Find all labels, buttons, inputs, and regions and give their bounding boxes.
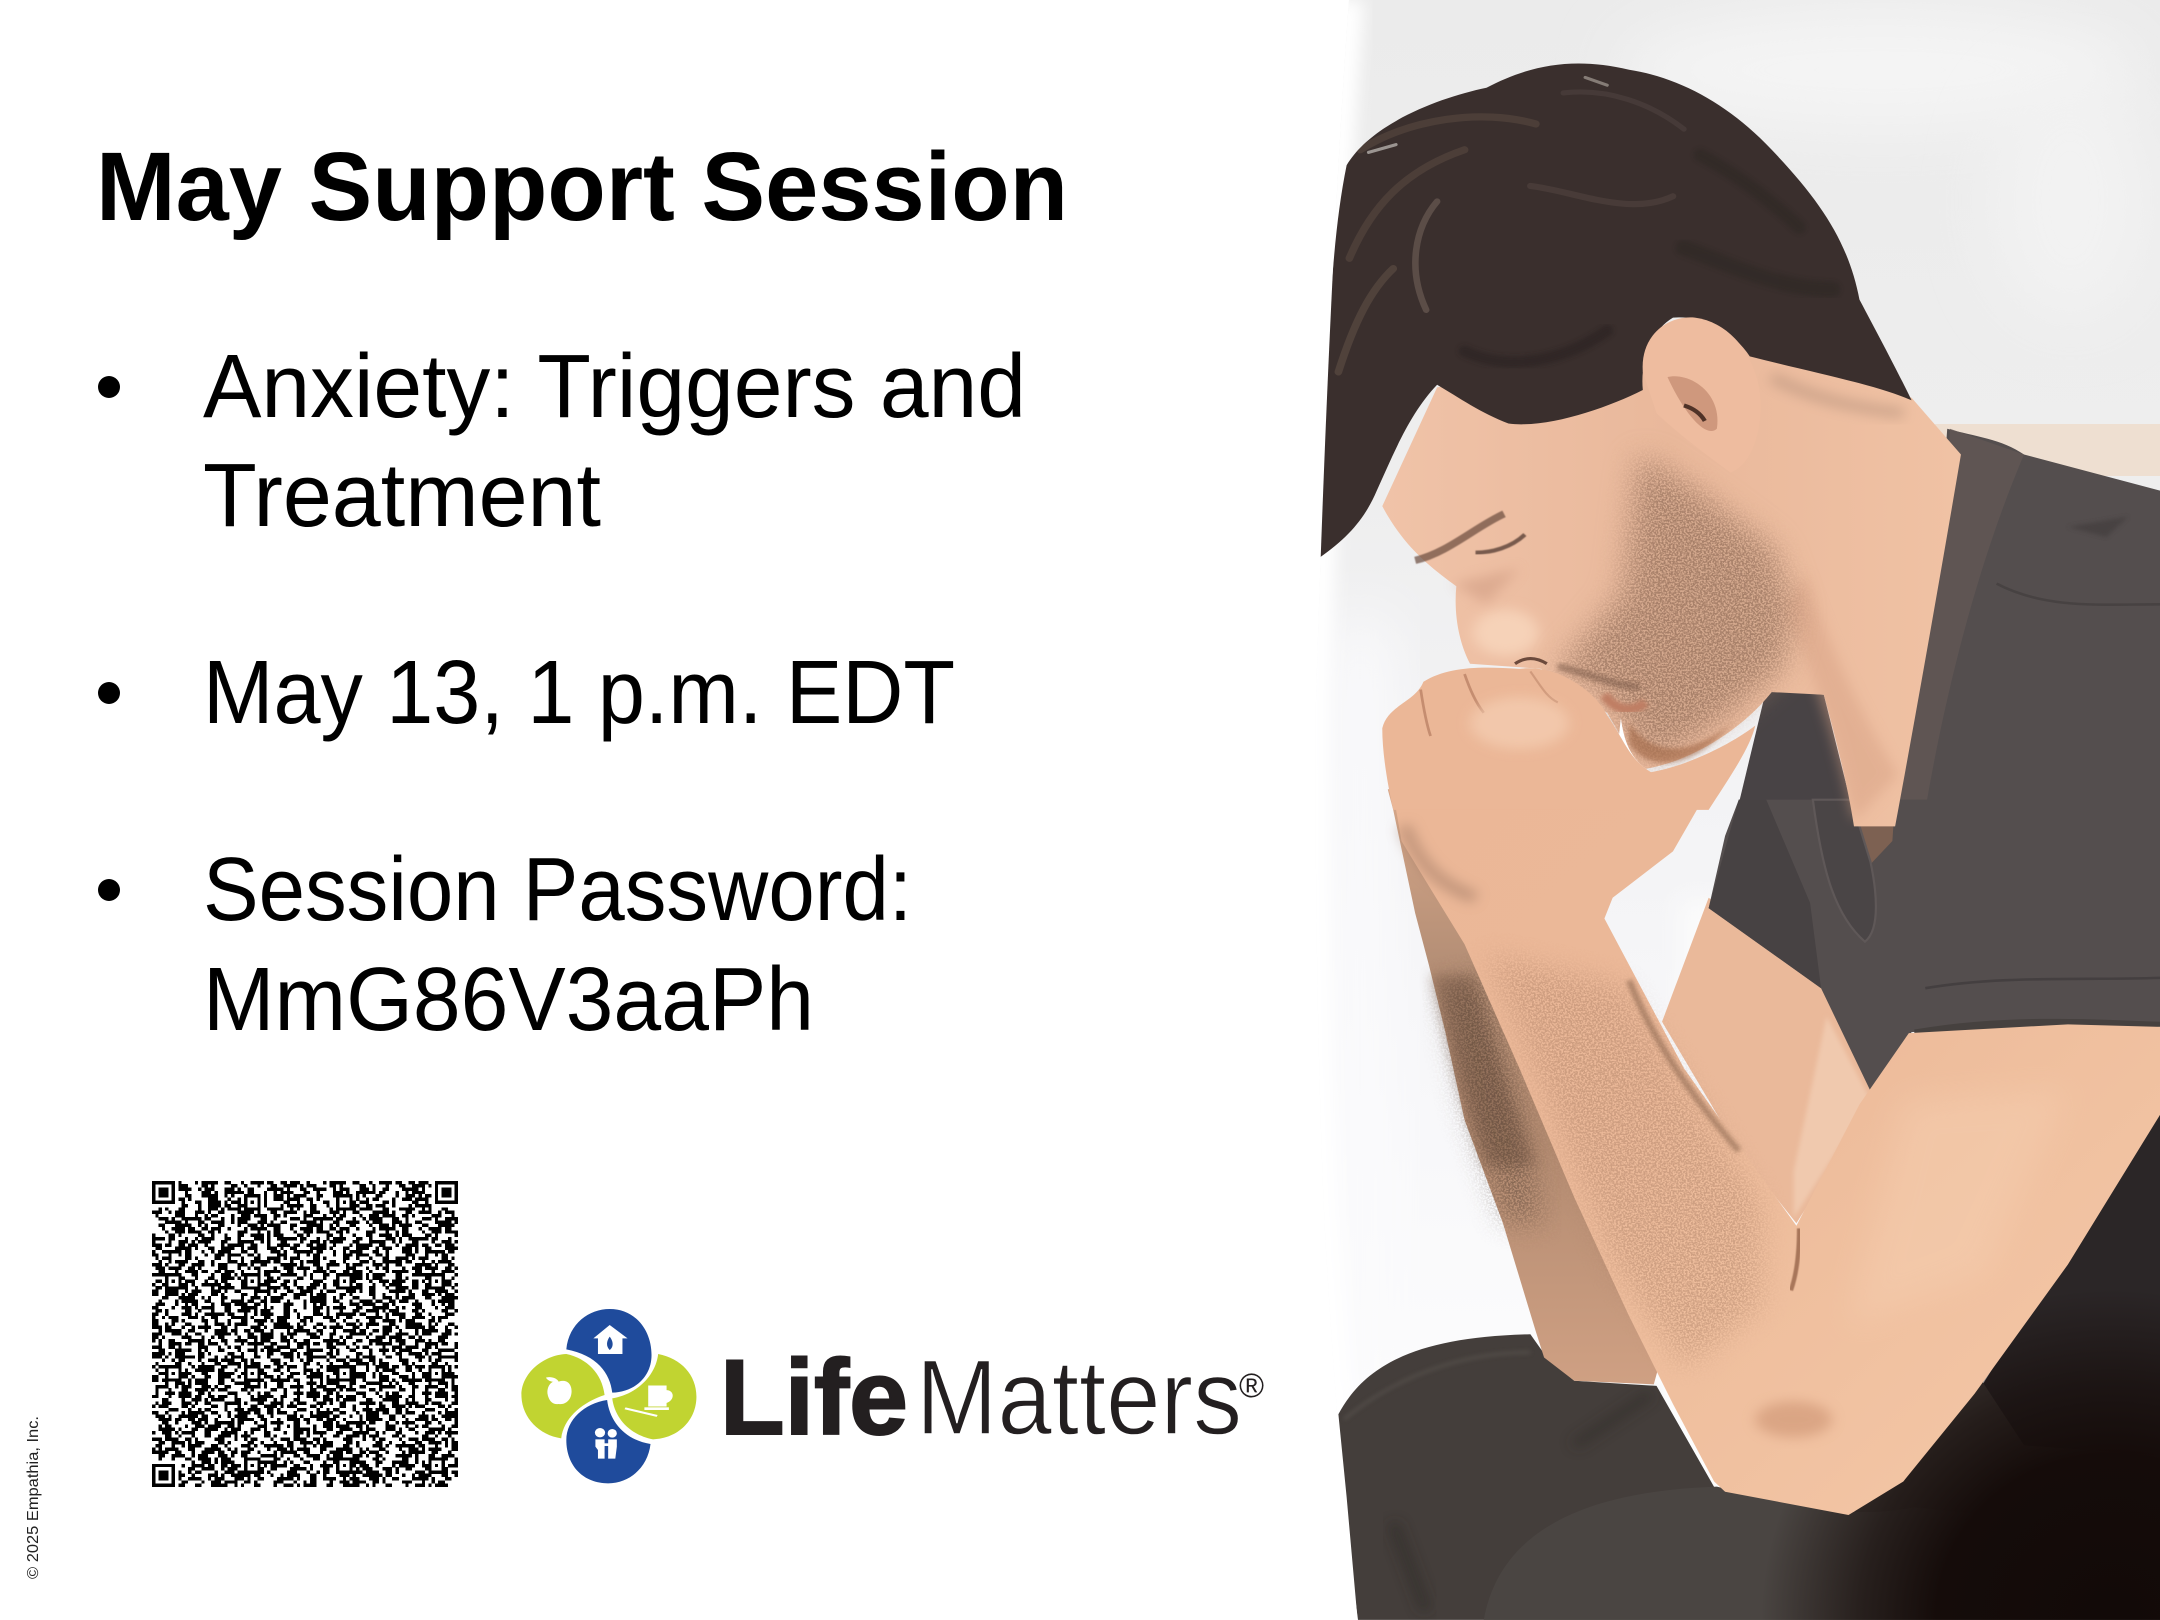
fist: [1382, 668, 1755, 810]
lower body: torso and trousers: [1338, 1099, 2160, 1620]
dark foreground blur: [1782, 1329, 2160, 1620]
nostril: [1515, 659, 1547, 664]
bullet item: topic: Treatment: [203, 446, 601, 546]
bullet item: date: May 13, 1 p.m. EDT: [203, 643, 955, 743]
wordmark: [720, 1337, 1264, 1457]
icon: mug: [649, 1386, 672, 1406]
front arm and elbow: [1394, 789, 2160, 1515]
ear: [1642, 317, 1740, 431]
wordmark: ®: [1239, 1367, 1264, 1405]
brow and eye: [1415, 514, 1504, 560]
far upper arm: [1662, 898, 1876, 1228]
wordmark: Life: [720, 1337, 908, 1457]
icon: apple: [547, 1381, 572, 1404]
LifeMatters logo: [521, 1309, 1264, 1483]
title: May Support Session: [96, 132, 1068, 241]
bullet item: password: Session Password:: [203, 840, 912, 940]
copyright note: © 2025 Empathia, Inc.: [25, 1416, 42, 1579]
wordmark: Matters: [916, 1337, 1242, 1457]
photo background: [1336, 0, 2160, 1064]
bullet item: password: [98, 840, 912, 1050]
bullet item: password: MmG86V3aaPh: [203, 950, 814, 1050]
t-shirt: [1709, 429, 2160, 1097]
bullet item: topic: [98, 337, 1026, 546]
QR code: [149, 1178, 461, 1490]
bullet item: topic: Anxiety: Triggers and: [203, 337, 1026, 437]
hair: [1319, 64, 1912, 558]
bullet list: [98, 337, 1026, 1050]
gap under chin: [1619, 718, 1646, 769]
icon: four-petal logo mark: [521, 1309, 696, 1483]
icon: house: [593, 1325, 628, 1354]
icon: family: [595, 1428, 605, 1437]
photo: thoughtful man resting chin on hands: [1300, 0, 2160, 1620]
stubble: [1558, 455, 1794, 764]
back forearm: [1388, 789, 1657, 1384]
head: face and neck: [1382, 331, 1961, 826]
